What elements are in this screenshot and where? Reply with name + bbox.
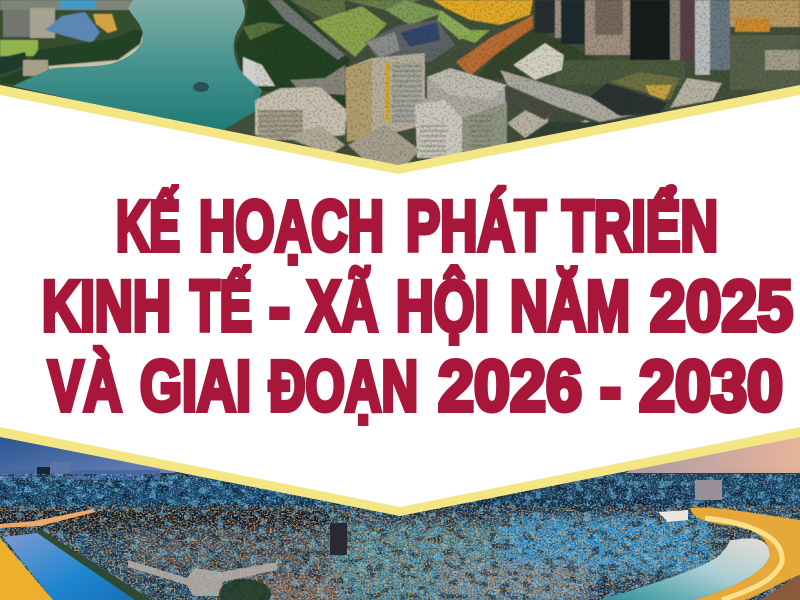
tree belt and shell building xyxy=(235,0,350,110)
title line 1: TRIỂN xyxy=(562,186,718,266)
hotel courtyard xyxy=(219,579,271,600)
left bridge lights xyxy=(0,509,95,528)
grey tower xyxy=(418,76,506,118)
low roof xyxy=(348,124,420,165)
elevated road and low buildings xyxy=(500,43,722,142)
apartment blocks xyxy=(255,53,507,172)
title line 3: - xyxy=(600,349,621,428)
glass towers xyxy=(535,0,800,100)
dark tower xyxy=(330,523,347,555)
yellow roof and orange road xyxy=(433,0,600,80)
title line 2: TẾ xyxy=(190,268,252,346)
bottom city photo xyxy=(0,430,800,600)
left yellow highway xyxy=(0,538,53,600)
distant skyline xyxy=(0,462,160,481)
sports lawns xyxy=(313,0,490,62)
highway light trail xyxy=(705,518,782,600)
title line 3: 2026 xyxy=(438,348,582,426)
title line 3: GIAI xyxy=(140,348,251,426)
right yellow highway xyxy=(690,507,800,600)
title line 2: NĂM xyxy=(510,268,630,346)
top aerial photo xyxy=(0,0,800,175)
colour districts xyxy=(0,480,800,600)
title line 2 xyxy=(42,266,793,348)
title xyxy=(42,186,793,428)
title line 3: 2030 xyxy=(639,348,783,426)
tan tower xyxy=(345,53,425,140)
river bank strip xyxy=(34,530,152,600)
left block xyxy=(255,87,347,140)
lower right road xyxy=(760,575,800,600)
left river xyxy=(3,533,135,600)
right sunset sky xyxy=(625,437,800,473)
title line 3: ĐOẠN xyxy=(269,348,418,426)
photo texture xyxy=(255,0,800,175)
riverside hotel xyxy=(128,560,277,596)
left evening sky xyxy=(0,437,175,473)
bottom yellow chevron band xyxy=(0,427,800,516)
title line 2: HỘI xyxy=(396,266,489,346)
title line 2: XÃ xyxy=(307,268,378,346)
right river xyxy=(600,539,770,600)
title line 1 xyxy=(116,186,718,266)
lake fountain xyxy=(193,82,209,92)
title line 2: KINH xyxy=(42,268,171,346)
title line 1: KẾ xyxy=(116,188,180,266)
distant pink towers xyxy=(695,480,722,500)
title line 1: HOẠCH xyxy=(199,188,384,266)
title line 3: VÀ xyxy=(48,348,122,426)
top yellow chevron band xyxy=(0,85,800,174)
lake xyxy=(13,0,262,132)
title line 1: PHÁT xyxy=(406,188,546,266)
city blotches and speckle lights xyxy=(0,474,800,600)
title line 2: - xyxy=(269,269,290,348)
left park with blue roofs xyxy=(0,0,146,92)
white roofs xyxy=(658,510,688,522)
title line 3 xyxy=(48,348,783,428)
